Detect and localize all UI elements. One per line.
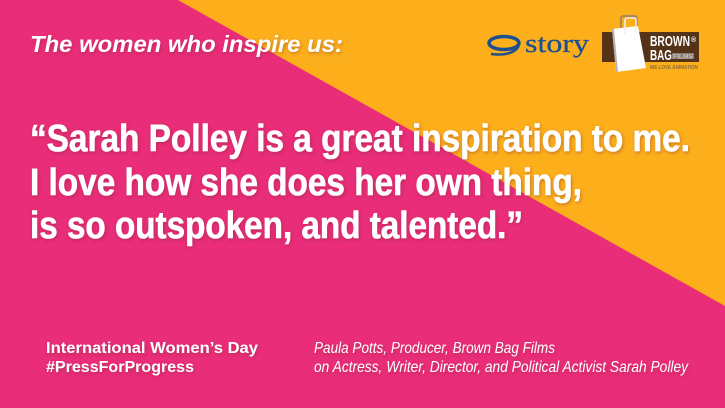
back bag handle [621, 16, 637, 29]
campaign line 1: International Women’s Day [46, 340, 258, 357]
attribution [314, 340, 689, 376]
bag side shading [612, 29, 618, 72]
campaign label [46, 340, 258, 376]
registered mark: ® [691, 36, 697, 44]
quote line 2: I love how she does her own thing, [30, 162, 582, 204]
heading: The women who inspire us: [30, 31, 343, 57]
logo: Brown Bag Films [602, 16, 699, 72]
wordmark bag: BAG [650, 47, 672, 64]
logo wordmark: story [525, 29, 589, 58]
white bag [612, 26, 646, 72]
brand panel [602, 32, 699, 62]
attribution line 1: Paula Potts, Producer, Brown Bag Films [314, 340, 555, 357]
quote text [30, 118, 690, 247]
front bag handle [625, 18, 636, 34]
wordmark films: FILMS [673, 54, 693, 60]
wordmark brown: BROWN [650, 33, 690, 50]
logo: 9story [489, 29, 589, 58]
films box [672, 53, 694, 59]
background: amber diagonal triangle [178, 0, 725, 306]
quote line 3: is so outspoken, and talented.” [30, 205, 523, 247]
logo 9 glyph [489, 36, 519, 55]
campaign hashtag: #PressForProgress [46, 359, 194, 376]
tagline: WE LOVE ANIMATION [650, 65, 698, 71]
